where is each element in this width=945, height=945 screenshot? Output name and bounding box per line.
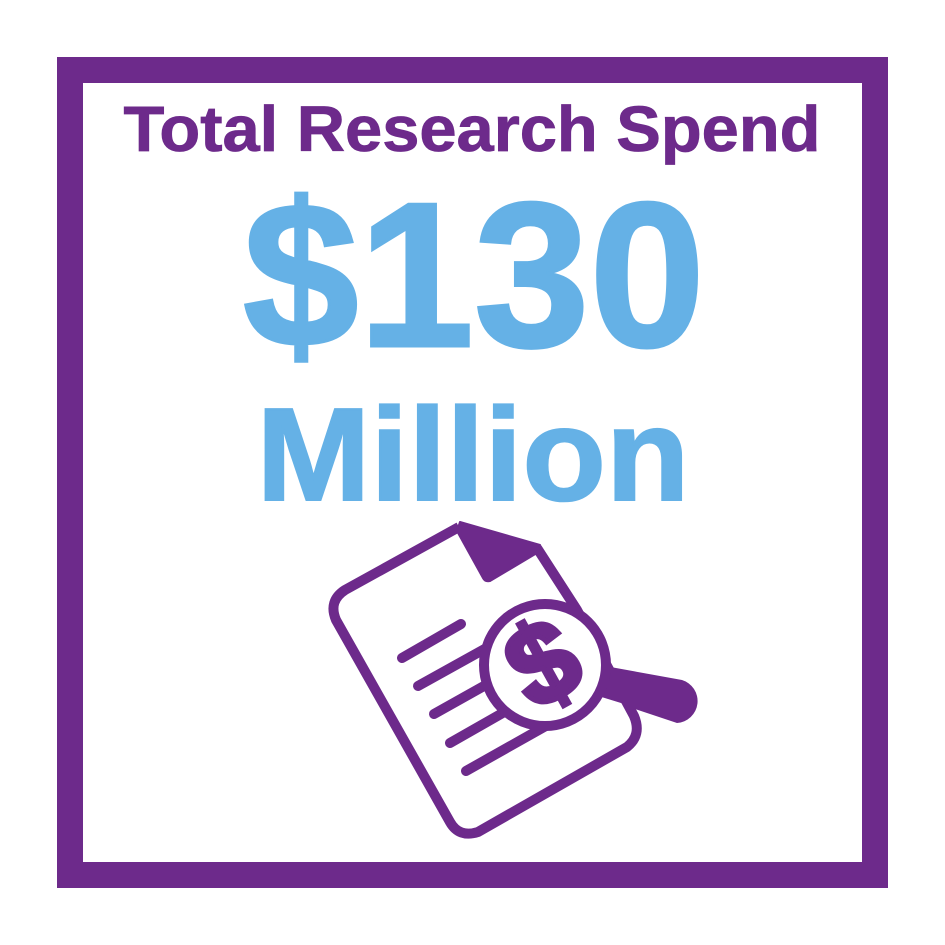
icon: document outline xyxy=(333,527,637,834)
icon: dollar sign: $ xyxy=(485,593,602,734)
icon: magnifier handle xyxy=(595,666,698,723)
icon: folded corner xyxy=(457,522,540,581)
unit: million: Million xyxy=(256,381,690,528)
icon: magnifier lens xyxy=(484,604,606,726)
heading: total research spend: Total Research Spend xyxy=(124,93,820,165)
icon: document with magnifying glass and dollar sign xyxy=(333,522,698,834)
icon: text lines xyxy=(402,624,560,771)
amount: $130: $130 xyxy=(243,160,705,390)
panel: purple frame xyxy=(70,70,875,875)
